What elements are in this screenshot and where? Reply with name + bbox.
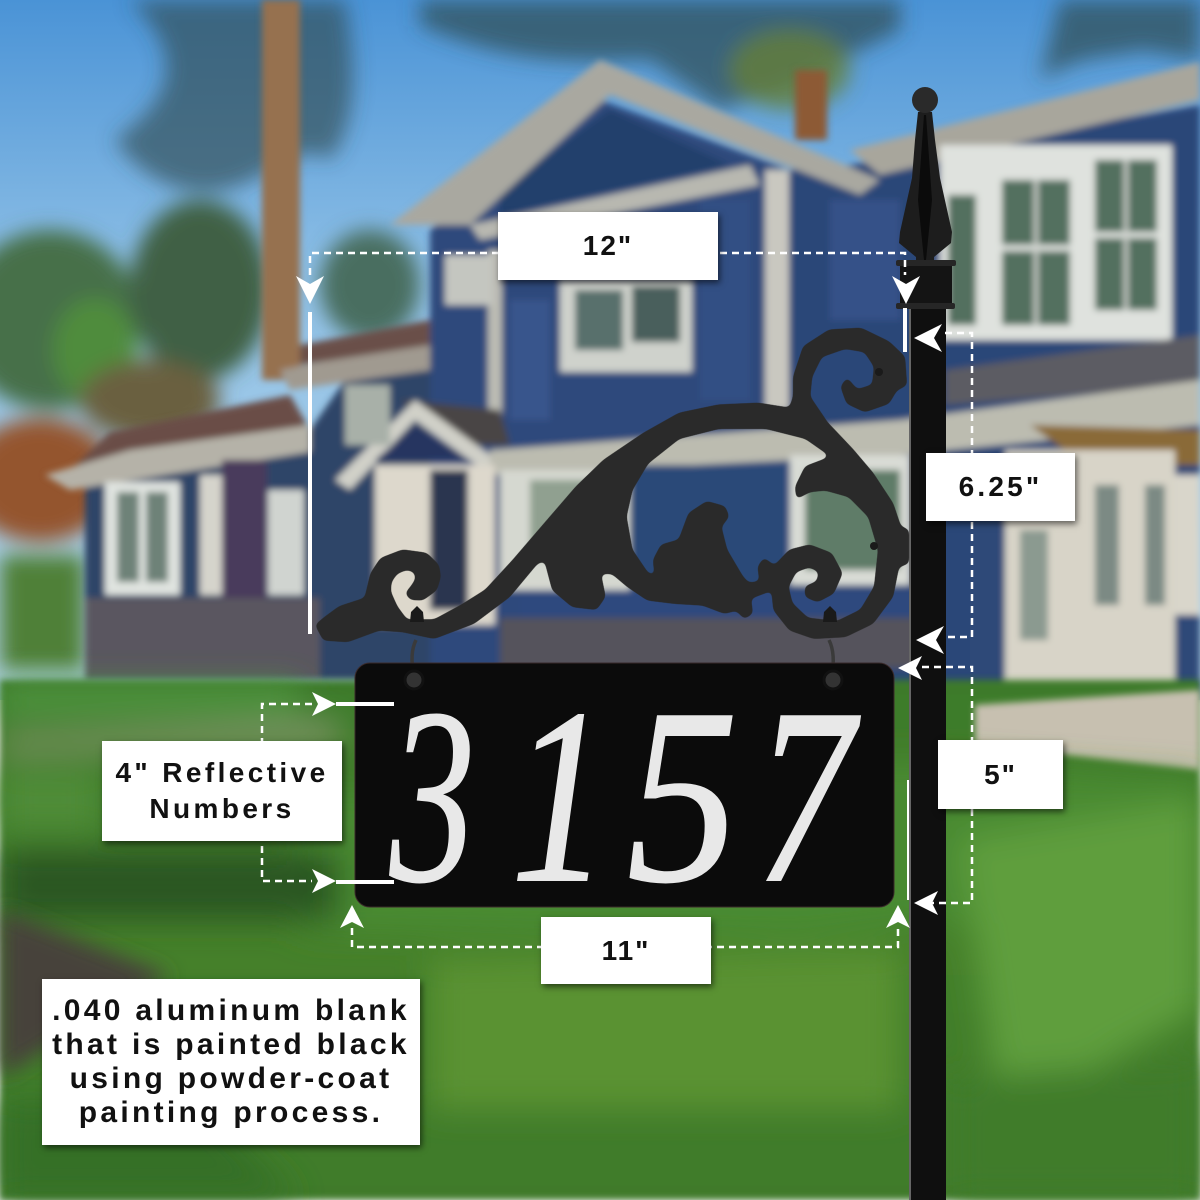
finial [896, 87, 956, 309]
nuts [410, 368, 883, 622]
label: aluminum blank description [42, 979, 420, 1145]
top scroll [790, 328, 906, 420]
label: aluminum blank description: .040 aluminum blank [52, 994, 410, 1027]
upper windows [560, 280, 692, 372]
right ring and leaf [772, 417, 908, 638]
mid roofs [945, 335, 1200, 405]
sign plate with reflective numbers: 5 [627, 658, 738, 935]
left wing [85, 370, 430, 680]
label: 11 inch: 11" [602, 934, 650, 966]
label: 12 inch width [498, 212, 718, 280]
label: aluminum blank description: that is painted black [52, 1028, 410, 1061]
label: 5 inch: 5" [984, 758, 1017, 790]
label: aluminum blank description: using powder-coat [70, 1062, 392, 1095]
bird and lower flow [628, 502, 773, 618]
label: 11 inch [541, 917, 711, 984]
label: 6.25 inch: 6.25" [959, 471, 1042, 502]
sign plate with reflective numbers: 1 [511, 658, 608, 935]
label: 12 inch width: 12" [583, 230, 633, 261]
post [909, 305, 946, 1200]
label: aluminum blank description: painting process. [79, 1096, 383, 1129]
sign plate with reflective numbers: 7 [756, 658, 860, 935]
main blue wall [430, 100, 790, 720]
porch right [1030, 425, 1200, 465]
scroll bracket [316, 328, 908, 642]
porch [375, 465, 495, 625]
label: 4 inch reflective numbers: 4" Reflective [115, 757, 329, 788]
label: 4 inch reflective numbers: Numbers [149, 793, 295, 824]
roofs [390, 60, 880, 225]
sign plate with reflective numbers: 3 [389, 659, 475, 935]
hooks [412, 640, 833, 676]
label: 5 inch [938, 740, 1063, 809]
main arch, tail and left scroll [316, 403, 853, 642]
label: 6.25 inch [926, 453, 1075, 521]
label: 4 inch reflective numbers [102, 741, 342, 841]
